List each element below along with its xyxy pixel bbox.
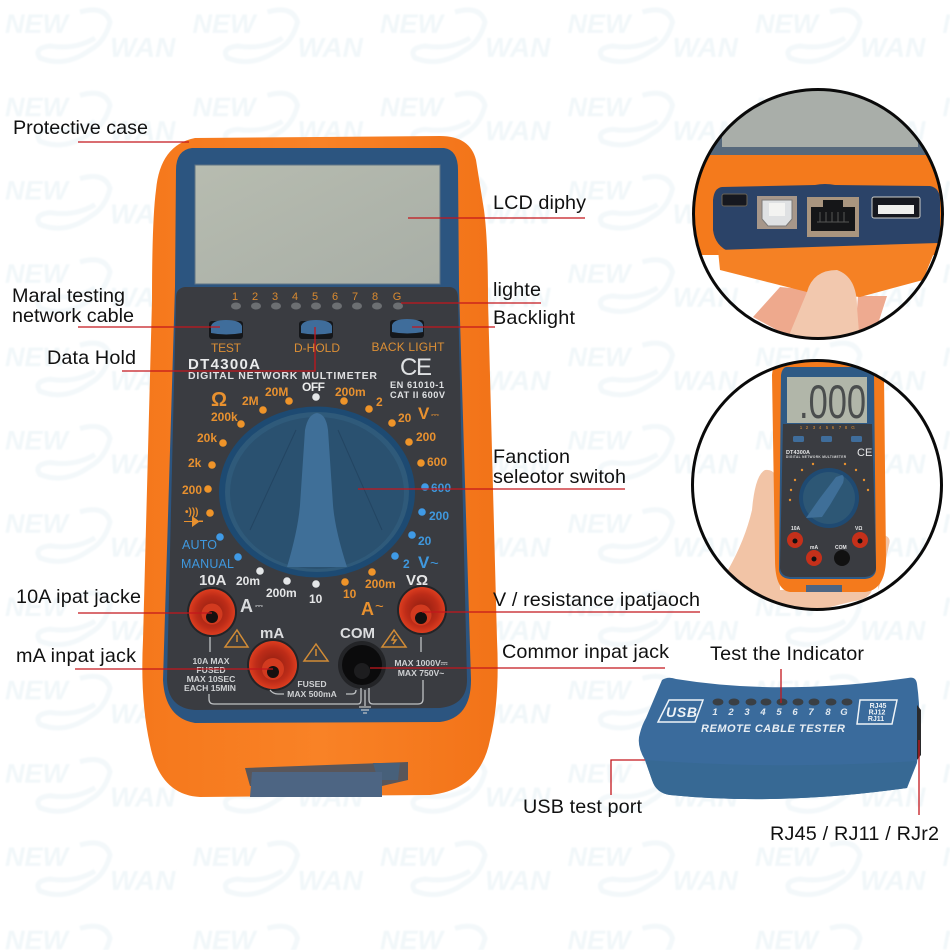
LED numbers: 8 <box>372 291 378 303</box>
callout: test indicator: Test the Indicator <box>710 643 864 665</box>
DC voltage range labels <box>335 385 447 469</box>
mini jack labels: 10A <box>791 526 801 532</box>
USB-B port <box>757 196 797 229</box>
current range labels: VΩ <box>406 572 428 589</box>
current range labels: 200m <box>365 577 396 591</box>
RJ45 port <box>807 197 859 237</box>
callout: USB test port <box>523 760 645 818</box>
RJ box <box>857 700 897 724</box>
jack labels: COM <box>340 625 375 642</box>
callout: USB test port: USB test port <box>523 796 642 818</box>
bottom tilt stand <box>245 762 408 797</box>
current limits text: MAX 500mA <box>287 689 337 699</box>
tester LEDs <box>712 698 852 706</box>
AC voltage range labels: 200 <box>429 509 449 523</box>
mini LEDs and labels: 8 <box>845 425 848 430</box>
mini stand <box>806 585 842 592</box>
diode and buzzer icon <box>184 507 203 527</box>
AC voltage range labels: AUTO <box>182 538 217 552</box>
CE certification <box>390 354 446 400</box>
LCD screen <box>195 165 440 284</box>
callout: LCD display: LCD diphy <box>493 192 586 214</box>
CE certification: CE <box>400 354 432 381</box>
mini dial pointer <box>806 475 844 518</box>
USB box: USB <box>666 704 697 720</box>
thumb <box>790 270 859 337</box>
hand fingers <box>753 287 807 334</box>
current range labels: 20m <box>236 574 260 588</box>
tester body <box>639 678 920 799</box>
RJ box: RJ11 <box>868 716 884 723</box>
hand <box>728 470 890 614</box>
jack labels <box>260 625 375 642</box>
model name: DT4300A <box>188 356 260 373</box>
protective orange case <box>142 136 498 797</box>
tester LED numbers: 7 <box>808 707 814 718</box>
LED numbers: 3 <box>272 291 278 303</box>
DC voltage range labels: 200m <box>335 385 366 399</box>
callout: function selector switch <box>358 446 626 489</box>
tester name: REMOTE CABLE TESTER <box>701 723 845 735</box>
callout: mA input jack: mA inpat jack <box>16 645 136 667</box>
LED numbers: 7 <box>352 291 358 303</box>
USB-A port <box>872 197 920 218</box>
mini LEDs and labels: 3 <box>813 425 816 430</box>
current range labels: 10 <box>343 587 357 601</box>
LCD and bezel detail <box>722 91 918 147</box>
current range labels: 10A <box>199 572 227 589</box>
navy port panel <box>713 184 940 252</box>
mini LEDs and labels: 4 <box>819 425 822 430</box>
AC voltage range labels <box>181 481 451 572</box>
indicator LEDs <box>231 302 403 310</box>
resistance range labels: 200k <box>211 410 238 424</box>
mini jack labels: mA <box>810 545 818 551</box>
current limits text: EACH 15MIN <box>184 683 236 693</box>
resistance range labels: 2k <box>188 456 202 470</box>
callout: 10A input jack: 10A ipat jacke <box>16 586 141 608</box>
input jack: V ohm <box>397 585 447 635</box>
AC voltage range labels: 20 <box>418 534 432 548</box>
AC voltage range labels: 2 <box>403 557 410 571</box>
button labels: BACK LIGHT <box>372 340 445 354</box>
wiring brackets and ground <box>209 637 423 713</box>
AC voltage range labels: ~ <box>430 555 439 572</box>
DC voltage range labels: ⎓ <box>431 410 439 421</box>
callout: light: lighte <box>493 279 541 301</box>
multimeter device <box>142 136 498 797</box>
tester LED numbers <box>712 707 848 718</box>
mini meter face <box>779 367 876 579</box>
callout: testing network cable: Maral testing <box>12 285 125 307</box>
callout: V resistance input jack: V / resistance ipatjaoch <box>493 589 700 611</box>
diode and buzzer icon: •))) <box>185 507 198 518</box>
current range labels: ⎓ <box>255 601 263 612</box>
current limits text <box>184 656 449 699</box>
AC voltage range labels: 600 <box>431 481 451 495</box>
tester LED numbers: 1 <box>712 707 718 718</box>
button labels <box>211 340 445 355</box>
inset circle: top ports <box>690 85 950 345</box>
mini LEDs and labels: 6 <box>832 425 835 430</box>
DC voltage range labels: 2 <box>376 395 383 409</box>
LED numbers: 1 <box>232 291 238 303</box>
AC voltage range labels: MANUAL <box>181 557 234 571</box>
callout: light <box>401 279 541 303</box>
button labels: D-HOLD <box>294 341 340 355</box>
current limits text: MAX 10SEC <box>187 674 235 684</box>
mini USB port <box>722 194 747 206</box>
LED numbers: 6 <box>332 291 338 303</box>
callout: protective case: Protective case <box>13 117 148 139</box>
LED numbers: 2 <box>252 291 258 303</box>
resistance range labels: 2M <box>242 394 259 408</box>
tester LED numbers: 8 <box>825 707 831 718</box>
current limits text: MAX 1000V⎓ <box>394 658 449 668</box>
current range labels: A <box>240 596 253 616</box>
mini LCD <box>787 377 867 423</box>
mini dial <box>799 468 859 528</box>
remote cable tester unit <box>639 678 921 799</box>
blue face plate <box>163 148 471 723</box>
resistance range labels: 20k <box>197 431 217 445</box>
USB box <box>658 700 703 722</box>
RJ box: RJ12 <box>869 710 885 716</box>
callout: data hold <box>47 327 315 371</box>
LED numbers: G <box>393 291 401 303</box>
callout: data hold: Data Hold <box>47 347 136 369</box>
buttons <box>209 319 424 339</box>
LED numbers: 4 <box>292 291 298 303</box>
mini LEDs and labels: 7 <box>839 425 842 430</box>
DC voltage range labels: 600 <box>427 455 447 469</box>
CE certification: CAT II 600V <box>390 390 446 400</box>
CE certification: EN 61010-1 <box>390 380 444 390</box>
current limits text: 10A MAX <box>193 656 230 666</box>
mini dial dots <box>789 463 869 501</box>
orange case top <box>690 155 950 255</box>
RJ box: RJ45 <box>870 703 886 710</box>
current range labels: A <box>361 599 374 619</box>
mini buttons <box>793 436 862 442</box>
current limits text: FUSED <box>297 679 327 689</box>
model name <box>188 356 377 394</box>
mini LCD reading: .000 <box>799 375 866 428</box>
callout: testing network cable <box>12 285 220 327</box>
tester right connector <box>917 705 921 760</box>
mini LEDs and labels: 2 <box>806 425 809 430</box>
AC voltage range labels: V <box>418 553 430 572</box>
callout: backlight: Backlight <box>493 307 576 329</box>
mini model name: CE <box>857 447 872 459</box>
callout: testing network cable: network cable <box>12 305 134 327</box>
callout: function selector switch: seleotor switoh <box>493 466 626 488</box>
input jack: COM <box>338 641 386 689</box>
input jack: 10A <box>187 587 237 637</box>
mini meter case <box>772 360 886 592</box>
tester LED numbers: 4 <box>759 707 766 718</box>
mini jack labels <box>791 526 862 551</box>
current range labels: ~ <box>375 598 384 615</box>
callout: RJ ports: RJ45 / RJ11 / RJr2 <box>770 823 939 845</box>
dial pointer <box>287 413 347 567</box>
tester LED numbers: 5 <box>776 707 782 718</box>
LED numbers: 5 <box>312 291 318 303</box>
resistance range labels: 200 <box>182 483 202 497</box>
DC voltage range labels: 20 <box>398 411 412 425</box>
tester LED numbers: 2 <box>727 707 734 718</box>
model name: OFF <box>302 380 325 394</box>
mini model name: DT4300A <box>786 450 810 456</box>
current range labels: 10 <box>309 592 323 606</box>
orange flap <box>718 243 938 297</box>
inset circle: meter in hand <box>692 360 942 614</box>
jack labels: mA <box>260 625 284 642</box>
rotary dial <box>219 406 415 578</box>
current range labels <box>199 572 428 619</box>
mini model name: DIGITAL NETWORK MULTIMETER <box>786 455 847 459</box>
dark control panel <box>167 287 467 710</box>
DC voltage range labels: 200 <box>416 430 436 444</box>
resistance range labels: Ω <box>211 389 227 411</box>
DC voltage range labels: V <box>418 404 430 423</box>
mini jack labels: COM <box>835 545 847 551</box>
warning triangles <box>225 630 406 661</box>
resistance range labels <box>182 385 288 497</box>
resistance range labels: 20M <box>265 385 288 399</box>
tester LED numbers: 6 <box>792 707 798 718</box>
input jack: mA <box>247 639 299 691</box>
mini LEDs and labels: 5 <box>826 425 829 430</box>
model name: DIGITAL NETWORK MULTIMETER <box>188 370 377 382</box>
current limits text: MAX 750V~ <box>398 668 444 678</box>
mini LEDs and labels: 1 <box>800 425 803 430</box>
callout: function selector switch: Fanction <box>493 446 570 468</box>
mini model name <box>786 448 872 458</box>
mini LEDs and labels <box>800 426 854 429</box>
mini jack labels: VΩ <box>855 526 862 532</box>
tester LED numbers: 3 <box>744 707 750 718</box>
mini jacks <box>787 532 868 566</box>
current limits text: FUSED <box>196 665 226 675</box>
button labels: TEST <box>211 341 242 355</box>
callout: common input jack: Commor inpat jack <box>502 641 669 663</box>
tester LED numbers: G <box>840 707 848 718</box>
mini control panel <box>780 424 876 577</box>
mini LEDs and labels: G <box>851 425 855 430</box>
current range labels: 200m <box>266 586 297 600</box>
dial position dots <box>204 393 429 588</box>
LED numbers <box>232 291 401 303</box>
